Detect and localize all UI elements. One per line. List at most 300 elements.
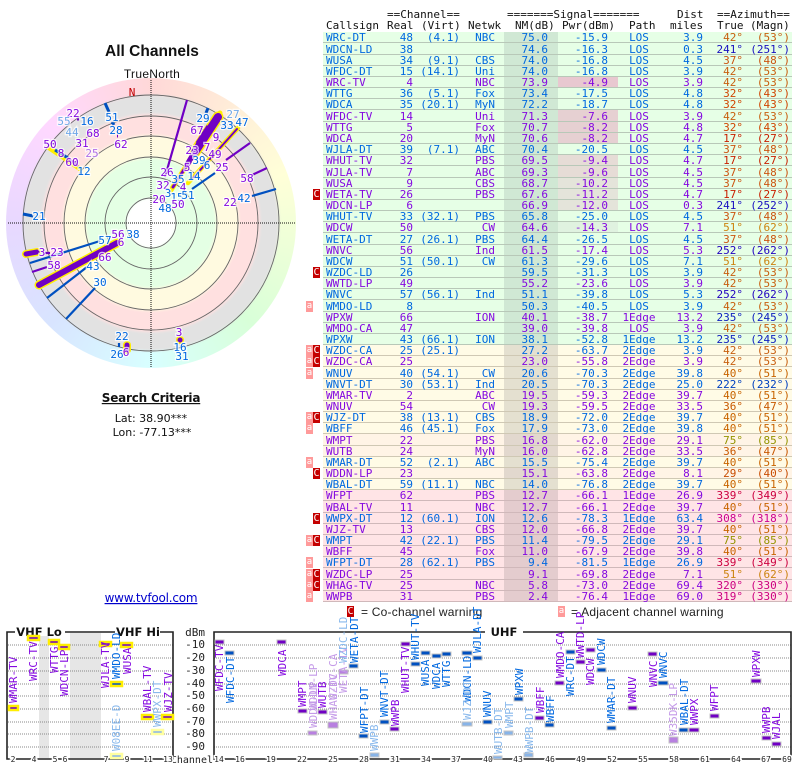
row: WNUV digital: 20.6 [522,367,548,380]
row: WZDC-LP: 25 [400,568,413,581]
icon: co-channel warning: C [313,189,320,200]
row: WFPT: 26.9 [676,489,703,502]
station: WDDN-LP: WDDN-LP [307,663,320,710]
row: WNUV analog: 36° [723,400,743,413]
row: WMDO-CA: -39.8 [575,322,608,335]
row: WMPT digital: (85°) [757,534,790,547]
station: WUTB: WUTB [316,681,329,708]
row: WDCW digital: LOS [629,255,649,268]
channel labels on radar: 28 [109,124,123,137]
row: WJLA-TV: (48°) [757,166,790,179]
row: WDDN-LP: 23 [400,467,413,480]
row: WFPT-DT [323,557,792,568]
channel labels on radar: 42 [237,192,251,205]
row: WRC-TV: NBC [475,76,495,89]
row: WMDO-CA: 39.0 [522,322,548,335]
row: WJZ-DT [323,411,792,424]
row: WETA-DT [323,233,792,246]
row: WWPB: 1Edge [622,590,656,603]
row: WWTD-LP: WWTD-LP [326,277,372,290]
row: WFDC-TV: 42° [723,110,743,123]
row: WZDC-CA analog: -55.8 [575,355,608,368]
row: WTTG: WTTG [326,87,352,100]
row: WMAR-DT: WMAR-DT [326,456,372,469]
row: WFDC-TV: 3.9 [683,110,703,123]
row: WMDO-CA: (53°) [757,322,790,335]
channel labels on radar: 39 [192,154,206,167]
station: WNUV: WNUV [626,676,639,703]
row: WDCA [323,98,792,111]
station: WMPT: WMPT [296,680,309,707]
row: WFDC-DT: Uni [475,65,495,78]
row: WNVC: 5.3 [683,244,703,257]
row: WWPX-DT: -78.3 [575,512,608,525]
row: WDDN-LP: 2Edge [622,467,656,480]
channel labels on radar: 51 [105,111,119,124]
heading: search criteria: Search Criteria [102,391,200,405]
row: WNUV analog: 54 [400,400,413,413]
row: WHUT-TV digital: (48°) [757,210,790,223]
row: WUSA analog: 68.7 [522,177,548,190]
row: WNVT-DT: WNVT-DT [326,378,372,391]
row: WNVC: Ind [475,244,495,257]
row: WMAR-DT: (2.1) [427,456,460,469]
row: WZDC-CA digital: (25.1) [420,344,460,357]
row: WDCA: 35 [400,98,413,111]
row: WWPB: 31 [400,590,413,603]
channel axis: 46 [545,755,555,764]
row: WTTG: LOS [629,87,649,100]
row: WDCW digital: 51 [400,255,413,268]
row: WJLA-TV: -9.6 [582,166,608,179]
row: WMPT digital: 29.1 [676,534,703,547]
row: WHUT-TV digital: PBS [475,210,495,223]
channel axis: 69 [782,755,792,764]
row: WNUV analog: -59.5 [575,400,608,413]
channel axis: 34 [421,755,431,764]
channel axis: 40 [483,755,493,764]
row: WDCN-LD: 74.6 [522,43,548,56]
row: WFDC-TV: -7.6 [582,110,608,123]
station: WDDN-LP: WDDN-LP [307,681,320,728]
row: WJZ-TV [323,524,792,535]
station: WBAL-TV: WBAL-TV [141,665,154,712]
row: WZDC-CA analog: 2Edge [622,355,656,368]
row: WUTB: (47°) [757,445,790,458]
row: WZDC-CA digital: 27.2 [522,344,548,357]
row: WJZ-TV: 40° [723,523,743,536]
row: WDCN-LP: 6 [406,199,413,212]
channel axis: 49 [576,755,586,764]
station: WWPB-DT: WWPB-DT [523,706,536,753]
row: WZDC-CA analog [323,355,792,368]
row: WDCW digital: (62°) [757,255,790,268]
row: WWPX-DT: 1Edge [622,512,656,525]
row: WHAG-TV: NBC [475,579,495,592]
channel axis: 19 [266,755,276,764]
channel axis: 55 [638,755,648,764]
row: WJZ-DT: 18.9 [522,411,548,424]
channel labels on radar: 3 [165,187,171,200]
row: WJLA-TV: 37° [723,166,743,179]
row: WZDC-LD: WZDC-LD [326,266,372,279]
row: WRC-TV: -4.9 [582,76,608,89]
channel axis: 31 [390,755,400,764]
row: WDCW: 64.6 [522,221,548,234]
row: WTTG analog: -8.2 [582,121,608,134]
channel axis: 58 [669,755,679,764]
row: WDCA analog: 4.7 [683,132,703,145]
row: WDCW: 51° [723,221,743,234]
row: WRC-TV: (53°) [757,76,790,89]
row: WETA-DT: 64.4 [522,233,548,246]
row: WBFF analog: -67.9 [575,545,608,558]
row: WZDC-LD: 3.9 [683,266,703,279]
row: WMDO-LD [323,300,792,313]
row: WFPT: 62 [400,489,413,502]
row: WTTG: Fox [475,87,495,100]
row: WFPT-DT: 339° [716,556,743,569]
group header: Channel: ==Channel== [387,8,460,21]
row: WBFF analog: 40° [723,545,743,558]
row: WNVC digital: 57 [400,288,413,301]
row: WFPT: PBS [475,489,495,502]
row: WFDC-DT [323,65,792,78]
channel labels on radar: 16 [173,341,187,354]
channel labels on radar: 3 [176,326,182,339]
row: WJLA-DT: -20.5 [575,143,608,156]
row: WMDO-CA [323,322,792,335]
UHF heading: UHF [491,625,517,639]
icon: adjacent warning: a [307,368,312,378]
row: WBAL-TV: -66.1 [575,501,608,514]
row: WBAL-TV [323,501,792,513]
row: WJLA-DT: 4.5 [683,143,703,156]
VHF unused bands [39,633,101,758]
icon: adjacent warning: a [307,557,312,567]
channel labels on radar: 16 [80,115,94,128]
row: WZDC-CA analog: 25 [400,355,413,368]
row: WMAR-DT: 52 [400,456,413,469]
station: W35DK-LP: W35DK-LP [667,683,680,736]
row: WDCA analog: 17° [723,132,743,145]
icon: adjacent warning: a [307,412,312,422]
row: WTTG: 4.8 [683,87,703,100]
row: WBFF analog: WBFF [326,545,352,558]
row: WBAL-DT: 39.7 [676,478,703,491]
row: WMPT analog: -62.0 [575,434,608,447]
row: WRC-TV: 42° [723,76,743,89]
row: WUSA: -16.8 [575,54,608,67]
row: WMDO-LD: (53°) [757,300,790,313]
row: WNUV digital: (51°) [757,367,790,380]
row: WBAL-DT: -76.8 [575,478,608,491]
row: WJZ-DT: CBS [475,411,495,424]
row: WDDN-LP: -63.8 [575,467,608,480]
row: WDCW digital: WDCW [326,255,352,268]
row: WETA-TV [323,188,792,201]
row: WMPT digital [323,535,792,546]
channel axis: 11 [143,755,153,764]
row: WDCA analog [323,132,792,145]
row: WNVC digital [323,288,792,301]
station: WDCN-LP: WDCN-LP [58,649,71,696]
station: WNVC digital: WNVC [657,652,670,678]
row: WMDO-LD: 42° [723,300,743,313]
station: WUSA digital: WUSA [419,659,432,686]
row: WTTG analog: 4.8 [683,121,703,134]
channel labels on radar: 38 [126,228,140,241]
row: WWPX-DT: WWPX-DT [326,512,372,525]
row: WBAL-TV: 2Edge [622,501,656,514]
channel labels on radar: 68 [86,127,100,140]
row: WWTD-LP: 3.9 [683,277,703,290]
station: WPXW digital: WPXW [513,668,526,695]
row: WBFF digital: Fox [475,422,495,435]
row: WDCA: LOS [629,98,649,111]
row: WETA-TV: 26 [400,188,413,201]
row: WNVC digital: (56.1) [420,288,460,301]
row: WUSA analog [323,177,792,190]
row: WPXW: 66 [400,311,413,324]
station: WBFF digital: WBFF [544,696,557,722]
row: WUSA analog: 4.5 [683,177,703,190]
station: WWPB 67: WWPB [760,706,773,733]
row: WNUV digital: 2Edge [622,367,656,380]
row: WBFF analog: 39.8 [676,545,703,558]
row: WMDO-CA: WMDO-CA [326,322,372,335]
row: WRC-TV [323,76,792,89]
icon: co-channel warning: C [313,356,320,367]
channel labels on radar: 31 [175,350,189,363]
channel axis: 22 [297,755,307,764]
row: WHUT-TV: 69.5 [522,154,548,167]
row: WBFF digital: (45.1) [420,422,460,435]
row: WPXW: ION [475,311,495,324]
row: WWTD-LP: 49 [400,277,413,290]
channel axis: 13 [163,755,173,764]
rays: blue digital stations [23,103,276,347]
channel labels on radar: 62 [114,138,128,151]
row: WJLA-DT: (48°) [757,143,790,156]
group header: Signal: =======Signal======= [507,8,639,21]
row: WDCW: LOS [629,221,649,234]
icon: co-channel warning: C [313,412,320,423]
row: WNVT-DT: (53.1) [420,378,460,391]
row: WDCA: (20.1) [420,98,460,111]
row: WNVC: 61.5 [522,244,548,257]
row: WNUV digital [323,367,792,380]
row: WWTD-LP [323,277,792,290]
row: WDDN-LP: (40°) [757,467,790,480]
row: WRC-DT: 3.9 [683,31,703,44]
row: WMPT digital: 75° [723,534,743,547]
row: WWTD-LP: -23.6 [575,277,608,290]
row: WWPB: -76.4 [575,590,608,603]
dBm axis: -20 [185,651,205,664]
channel labels on radar: 50 [43,138,57,151]
rays: yellow-halo analog stations [26,113,238,350]
row: WDCW digital [323,255,792,268]
channel labels on radar: 26 [160,166,174,179]
icon: adjacent warning: a [307,423,312,433]
row: WFPT-DT: (62.1) [420,556,460,569]
column header: Path: Path [629,19,656,32]
row: WNVC: LOS [629,244,649,257]
row: WFDC-TV: WFDC-TV [326,110,372,123]
row: WBAL-TV: 40° [723,501,743,514]
row: WRC-DT: (4.1) [427,31,460,44]
row: WJLA-DT: ABC [475,143,495,156]
row: WWPB: 319° [716,590,743,603]
row: WMAR-DT: 39.7 [676,456,703,469]
row: WBFF digital: 2Edge [622,422,656,435]
channel labels on radar: 14 [187,170,201,183]
row: WMPT analog: 16.8 [522,434,548,447]
row: WJLA-TV: 69.3 [522,166,548,179]
row: WHUT-TV: LOS [629,154,649,167]
stations [7,606,783,759]
row: WJLA-DT [323,143,792,156]
row: WRC-DT: LOS [629,31,649,44]
station: WZDC-CA / WHAG-TV: WHAG-TV [327,673,340,720]
station: WBFF: WBFF [534,686,547,713]
row: WFPT: 12.7 [522,489,548,502]
row: WNUV digital: -70.3 [575,367,608,380]
row: WFPT-DT: 9.4 [528,556,548,569]
row: WZDC-LD: -31.3 [575,266,608,279]
row: WDCN-LP: WDCN-LP [326,199,372,212]
row: WMAR-DT: (51°) [757,456,790,469]
row: WFDC-DT: (53°) [757,65,790,78]
channel axis: 37 [451,755,461,764]
station: WWPX: WWPX [688,698,701,725]
VHF Hi heading: VHF Hi [116,625,160,639]
dBm axis: -30 [185,664,205,677]
channel axis: 25 [328,755,338,764]
row: WJLA-DT: 39 [400,143,413,156]
chart: VHF/UHF spectrum [7,606,792,766]
row: WRC-DT: 42° [723,31,743,44]
row: WFDC-DT: 42° [723,65,743,78]
column header: True: True [717,19,744,32]
row: WUSA analog: LOS [629,177,649,190]
row: WNUV analog: CW [482,400,495,413]
row: WFDC-DT: 15 [400,65,413,78]
row: WBAL-TV: (51°) [757,501,790,514]
row: WUSA: WUSA [326,54,352,67]
row: WBAL-DT: NBC [475,478,495,491]
row: WRC-DT: 48 [400,31,413,44]
channel labels on radar: 66 [98,251,112,264]
row: WPXW digital: ION [475,333,495,346]
channel labels on radar: 20 [152,193,166,206]
channel labels on radar: 6 [204,159,210,172]
row: WNUV digital: (54.1) [420,367,460,380]
row: WETA-DT: (26.1) [420,233,460,246]
row: WZDC-CA analog: 23.0 [522,355,548,368]
channel labels on radar: 23 [185,144,199,157]
row: WUSA analog: -10.2 [575,177,608,190]
row: WBFF analog: (51°) [757,545,790,558]
station: WHUT-TV digital: WHUT-TV [409,613,422,660]
row: WDCW: WDCW [326,221,352,234]
row: WDCN-LP: LOS [629,199,649,212]
row: WBFF digital: (51°) [757,422,790,435]
row: WNVT-DT [323,378,792,391]
channel labels on radar: 43 [86,260,100,273]
row: WZDC-CA digital: WZDC-CA [326,344,372,357]
row: WHAG-TV: 320° [716,579,743,592]
row: WDCN-LD: -16.3 [575,43,608,56]
row: WBAL-DT [323,479,792,490]
channel labels on radar: 22 [66,107,80,120]
row: WPXW digital: (66.1) [420,333,460,346]
station: WTTG digital: WTTG [440,660,453,687]
row: WZDC-CA digital [323,344,792,357]
row: WPXW: 40.1 [522,311,548,324]
row: WMDO-CA: 3.9 [683,322,703,335]
station: WHUT-TV: WHUT-TV [399,646,412,693]
longitude: Lon: -77.13*** [113,426,192,439]
row: WUSA: CBS [475,54,495,67]
row: WUTB: MyN [475,445,495,458]
row: WDCW digital: 61.3 [522,255,548,268]
dBm axis: -40 [185,677,205,690]
row: WZDC-CA analog: WZDC-CA [326,355,372,368]
channel labels on radar: 15 [170,191,184,204]
row: WJZ-DT: 39.7 [676,411,703,424]
row: WDCW: 7.1 [683,221,703,234]
row: WNUV analog: 33.5 [676,400,703,413]
row: WETA-TV: WETA-TV [326,188,372,201]
true north label: TrueNorth [124,67,180,81]
channel labels on radar: 56 [111,228,125,241]
row: WTTG: 36 [400,87,413,100]
row: WDCW digital: 51° [723,255,743,268]
station: WNVT-DT: WNVT-DT [378,670,391,717]
station: WFDC-DT: WFDC-DT [224,656,237,703]
row: WZDC-LP: 2Edge [622,568,656,581]
station data table [323,31,792,603]
station: WDCN-LD: WDCN-LD [461,656,474,702]
row: WFDC-TV: (53°) [757,110,790,123]
row: WFPT-DT: -81.5 [575,556,608,569]
row: WMAR-TV: 2 [406,389,413,402]
channel labels on radar: 51 [181,189,195,202]
row: WBAL-DT: 2Edge [622,478,656,491]
row: WBAL-DT: 59 [400,478,413,491]
channel labels on radar: 48 [158,202,172,215]
channel labels on radar: 12 [77,165,91,178]
row: WNUV digital: CW [482,367,495,380]
row: WBAL-TV: NBC [475,501,495,514]
row: WZDC-LP: WZDC-LP [326,568,372,581]
row: WNVC digital: 252° [716,288,743,301]
row: WBFF digital [323,422,792,435]
row: WFDC-DT: -16.8 [575,65,608,78]
row: WJZ-DT: -72.0 [575,411,608,424]
dBm axis: -50 [185,689,205,702]
channel axis: 64 [731,755,741,764]
channel labels on radar: 9 [213,131,219,144]
row: WMAR-TV: WMAR-TV [326,389,372,402]
row: WDCN-LP: 66.9 [522,199,548,212]
row: WRC-TV: WRC-TV [326,76,366,89]
channel labels on radar: 26 [110,348,124,361]
row: WPXW digital: 43 [400,333,413,346]
row: WUTB [323,446,792,457]
